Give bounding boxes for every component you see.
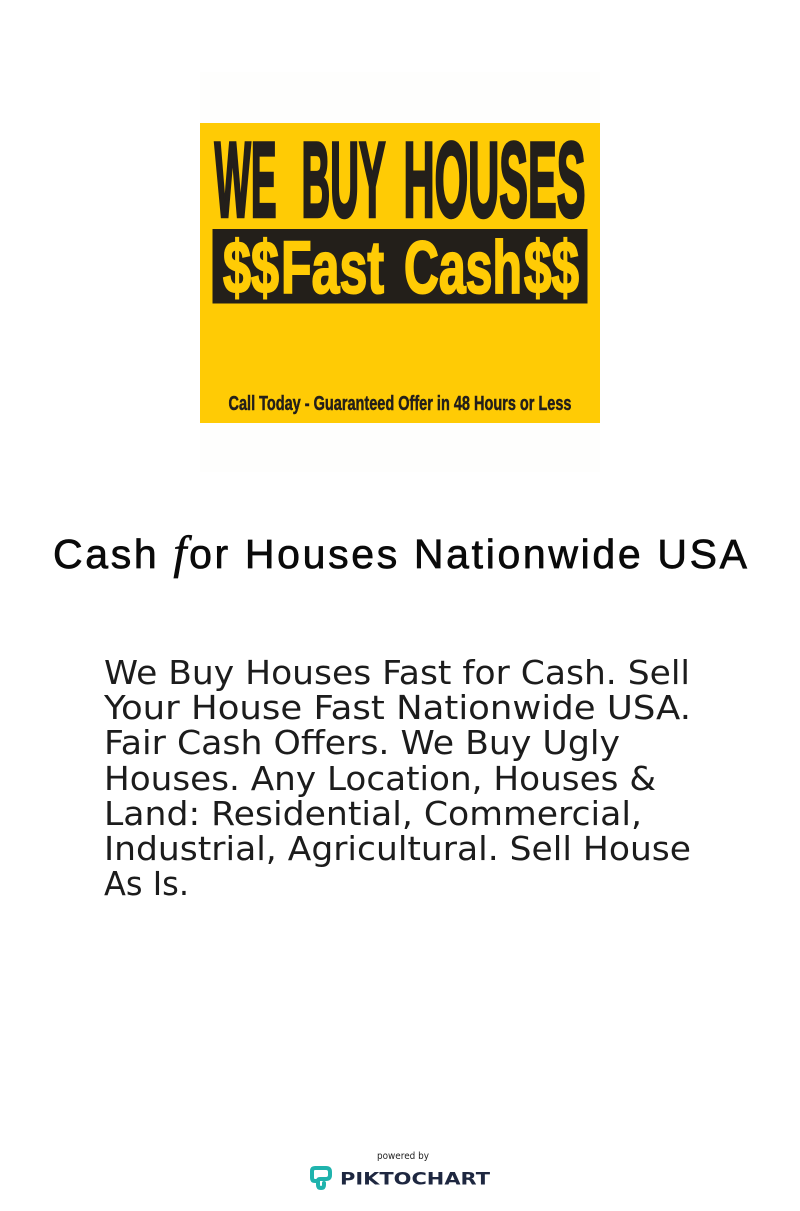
black banner: Cash [404, 226, 522, 309]
Piktochart wordmark: PIKTOCHART [340, 1170, 490, 1190]
black banner [212, 226, 588, 309]
yellow sign image [200, 120, 600, 423]
body text: Land: Residential, Commercial, [104, 794, 642, 833]
sign call to action: Call Today - Guaranteed Offer in 48 Hours or Less [228, 393, 572, 415]
body text: Industrial, Agricultural. Sell House [104, 829, 691, 868]
body text: Houses. Any Location, Houses & [104, 759, 656, 798]
body text: We Buy Houses Fast for Cash. Sell [104, 653, 690, 692]
black banner: $$ [524, 226, 579, 309]
sign headline [214, 120, 586, 240]
body text [103, 653, 691, 903]
body text: Fair Cash Offers. We Buy Ugly [104, 723, 620, 762]
body text: As Is. [104, 864, 189, 903]
powered by label: powered by [377, 1151, 429, 1162]
title: Cash for Houses Nationwide USA [53, 527, 748, 579]
black banner: Fast [281, 226, 384, 309]
body text: Your House Fast Nationwide USA. [103, 688, 691, 727]
sign headline: WE [214, 120, 276, 240]
black banner: $$ [223, 226, 279, 309]
icon: Piktochart logo mark [312, 1168, 330, 1188]
sign headline: BUY [302, 120, 386, 240]
footer: powered by Piktochart [312, 1151, 490, 1190]
